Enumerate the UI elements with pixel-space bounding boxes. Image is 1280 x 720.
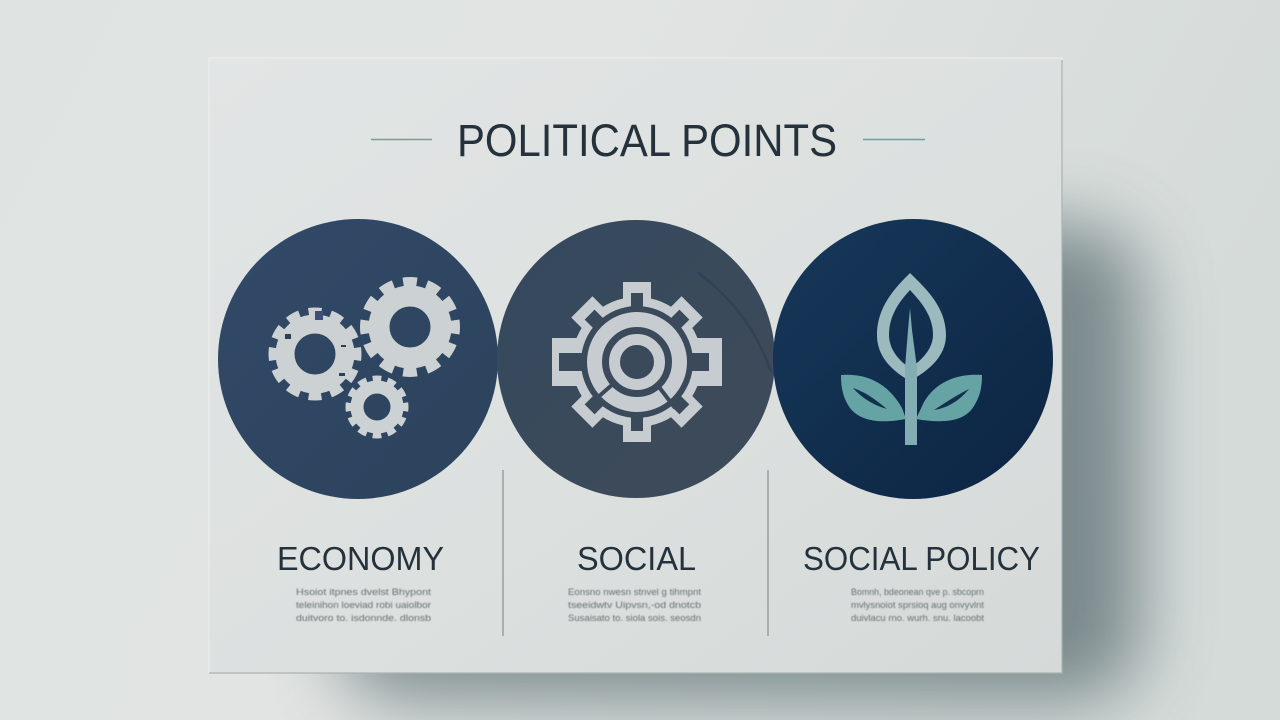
title: POLITICAL POINTS: [457, 115, 837, 166]
column: social policy text: duivlacu rno. wurh. snu. lacoobt: [851, 613, 984, 624]
column: social policy text: mvlysnoiot sprsioq aug onvyvlnt: [851, 600, 984, 611]
divider lines: [503, 470, 768, 636]
icon: plant sprout: [841, 273, 982, 445]
column: economy text: duitvoro to. isdonnde. dlonsb: [296, 613, 431, 624]
column: social policy text: SOCIAL POLICY: [803, 540, 1040, 577]
column: social text: Eonsno nwesn stnvel g tihmpnt: [568, 587, 701, 598]
column: social text: Susaisato to. siola sois. seosdn: [568, 613, 701, 624]
column: social policy text: Bomnh, bdeonean qve p. sbcoprn: [851, 587, 984, 598]
icon: outlined gear with rings: [552, 282, 722, 442]
column: social text: tseeidwtv Uipvsn,-od dnotcb: [568, 600, 701, 611]
column: economy text: teleinihon loeviad robi uaiolbor: [296, 600, 431, 611]
circle: social: [497, 220, 775, 498]
column: economy text: Hsoiot itpnes dvelst Bhypont: [296, 587, 431, 598]
circle: social policy: [773, 219, 1053, 499]
column: social text: SOCIAL: [577, 540, 696, 577]
icon: three gears: [273, 282, 455, 435]
column: economy text: ECONOMY: [277, 540, 444, 577]
column: economy text: [277, 540, 444, 624]
column: social policy text: [803, 540, 1040, 624]
column: social text: [568, 540, 701, 624]
circle: economy: [218, 219, 498, 499]
panel: card: [209, 58, 1062, 673]
